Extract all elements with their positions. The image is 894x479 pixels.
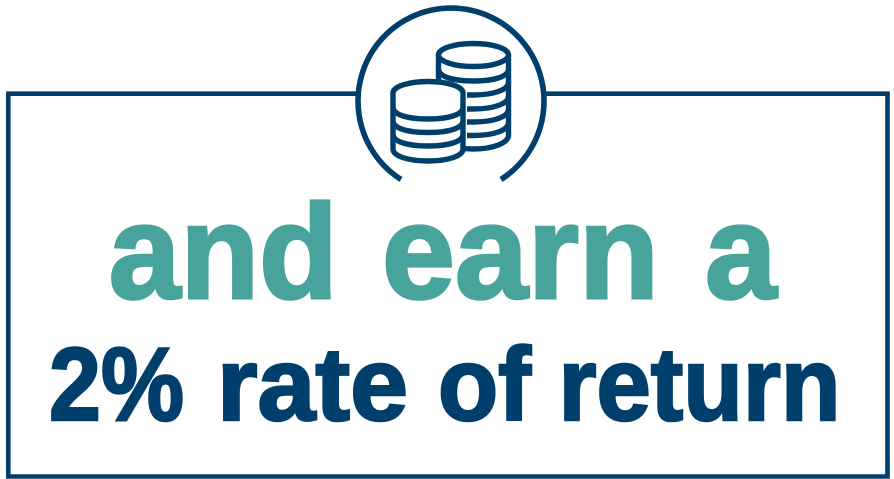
- heading: and earn a: a: [705, 178, 778, 327]
- heading: 2% rate of return: 2%: [49, 327, 184, 443]
- heading: 2% rate of return: rate: [217, 327, 408, 443]
- heading: 2% rate of return: of: [438, 327, 531, 443]
- heading: 2% rate of return: [49, 327, 840, 443]
- right coin stack: [438, 44, 508, 149]
- heading: and earn a: earn: [382, 178, 659, 327]
- heading: and earn a: and: [109, 178, 338, 327]
- frame: [8, 94, 888, 476]
- heading: 2% rate of return: return: [558, 327, 840, 443]
- icon: coin stacks: [393, 44, 508, 161]
- icon: circle arc: [358, 8, 544, 179]
- heading: and earn a: [109, 178, 778, 327]
- left coin stack: [393, 82, 463, 161]
